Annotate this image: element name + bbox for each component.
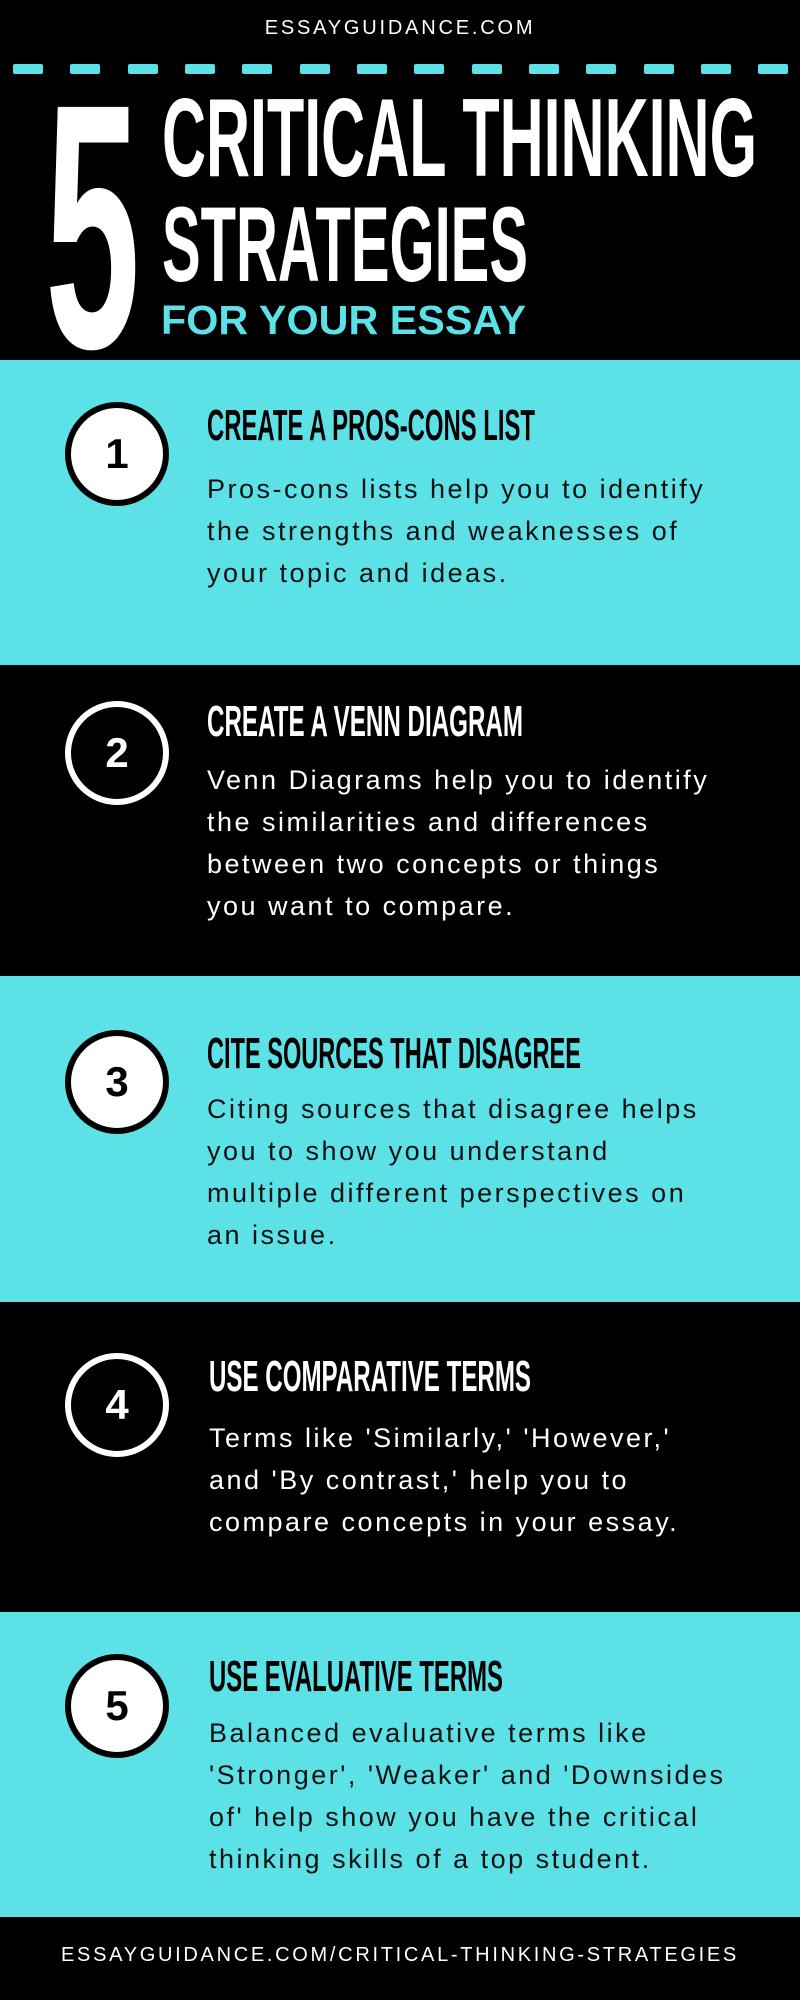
icon: number 4: 4 <box>105 1381 129 1428</box>
panel: strategy 4 <box>0 1302 800 1612</box>
header <box>0 0 800 360</box>
icon: number 1: 1 <box>105 430 129 477</box>
icon: number 5 <box>65 1654 169 1758</box>
footer <box>0 1917 800 2000</box>
text 5: thinking skills of a top student. <box>209 1844 652 1874</box>
text 1: your topic and ideas. <box>207 558 509 588</box>
dashed line <box>13 64 788 74</box>
text 5 <box>209 1718 725 1874</box>
text 3: an issue. <box>207 1220 338 1250</box>
icon: number 3 <box>65 1030 169 1134</box>
panel: strategy 5 <box>0 1612 800 1917</box>
text 4 <box>209 1423 679 1537</box>
text 3: multiple different perspectives on <box>207 1178 686 1208</box>
text 5: of' help show you have the critical <box>209 1802 699 1832</box>
text 2 <box>207 765 709 921</box>
title: FOR YOUR ESSAY <box>161 297 526 343</box>
footer url: ESSAYGUIDANCE.COM/CRITICAL-THINKING-STRATEGIES <box>61 1944 739 1966</box>
title <box>45 31 757 360</box>
text 4: Terms like 'Similarly,' 'However,' <box>209 1423 671 1453</box>
icon: number 4 <box>65 1353 169 1457</box>
text 1: Pros-cons lists help you to identify <box>207 474 705 504</box>
icon: number 2: 2 <box>105 729 129 776</box>
text 3: Citing sources that disagree helps <box>207 1094 699 1124</box>
site name: ESSAYGUIDANCE.COM <box>265 17 535 39</box>
icon: number 1 <box>65 402 169 506</box>
text 3: you to show you understand <box>207 1136 610 1166</box>
panel: strategy 2 <box>0 665 800 976</box>
text 2: the similarities and differences <box>207 807 650 837</box>
text 2: Venn Diagrams help you to identify <box>207 765 709 795</box>
panel: strategy 3 <box>0 976 800 1302</box>
text 5: Balanced evaluative terms like <box>209 1718 649 1748</box>
text 4: and 'By contrast,' help you to <box>209 1465 629 1495</box>
text 3 <box>207 1094 699 1250</box>
text 5: 'Stronger', 'Weaker' and 'Downsides <box>209 1760 725 1790</box>
icon: number 5: 5 <box>105 1682 129 1729</box>
icon: number 2 <box>65 701 169 805</box>
text 1 <box>207 474 705 588</box>
panel: strategy 1 <box>0 360 800 665</box>
text 4: compare concepts in your essay. <box>209 1507 679 1537</box>
text 1: the strengths and weaknesses of <box>207 516 679 546</box>
icon: number 3: 3 <box>105 1058 129 1105</box>
text 2: between two concepts or things <box>207 849 660 879</box>
text 2: you want to compare. <box>207 891 515 921</box>
